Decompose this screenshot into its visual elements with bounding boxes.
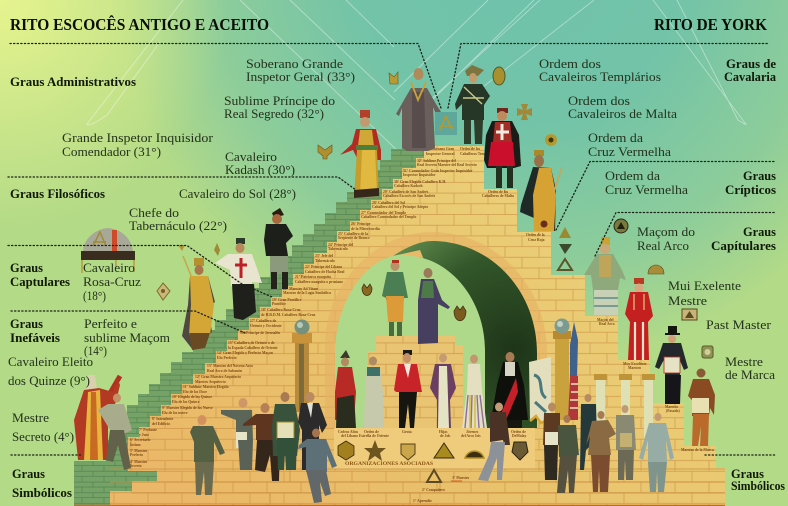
stair degree plates: del Edificio — [152, 422, 170, 426]
title: Rito Escocês Antigo e Aceito: RITO ESCOCÊS ANTIGO E ACEITO — [10, 15, 269, 34]
stair degree plates: 15° Caballero de Oriente o de — [228, 341, 275, 345]
icon: double-headed eagle — [318, 145, 332, 159]
arch — [325, 232, 547, 428]
label: Cavaleiro Rosa-Cruz: Rosa-Cruz — [83, 274, 141, 289]
stair degree plates: Muy Excelente — [623, 362, 647, 366]
label: Maçom do Real Arco: Maçom do — [637, 224, 695, 239]
stair degree plates: Caballeros Templarios — [460, 152, 496, 156]
stair degree plates: 33° Soberano Gran — [424, 147, 454, 151]
left column with sphere — [292, 320, 312, 412]
stair degree plates: 19° Gran Pontífice — [272, 298, 302, 302]
stair degree plates: Estrella de Oriente — [359, 434, 389, 438]
label: Mui Exelente Mestre: Mestre — [668, 293, 707, 308]
label: Mestre Secreto: Mestre — [12, 410, 49, 425]
label: Mestre de Marca: Mestre — [725, 354, 763, 369]
stair degree plates: 4° Maestro — [130, 460, 147, 464]
stair degree plates: 10° Elegido de los Quince — [172, 395, 212, 399]
stair degree plates: 28° Caballero del Sol — [372, 201, 405, 205]
stair degree plates: 23° Jefe del — [315, 254, 333, 258]
heading: Graus Captulares: Graus — [10, 261, 43, 275]
stair degree plates: Real Arco — [599, 322, 615, 326]
figure: Past Master with top hat — [655, 326, 688, 404]
label: Cavaleiro Kadash: Cavaleiro — [225, 149, 277, 164]
label: Ordem dos Cavaleiros de Malta: Cavaleiros de Malta — [568, 106, 677, 121]
title: Rito de York: RITO DE YORK — [654, 15, 768, 34]
stair degree plates: Maestro de la Marca — [681, 448, 714, 452]
figure: orange skirt woman in arch — [382, 260, 408, 336]
figure: purple and white woman in row — [430, 354, 456, 428]
label: Maçom do Real Arco — [637, 224, 695, 253]
label: Grande Inspetor Inquisidor Comendador — [62, 130, 214, 159]
stair degree plates: 7° Preboste — [139, 428, 157, 432]
figure: Sublime Príncipe — [340, 110, 381, 198]
label: Cavaleiro Kadash: Kadash (30°) — [225, 162, 295, 177]
label: Perfeito e sublime Maçom — [84, 316, 170, 358]
figure: man in dark blue-green — [580, 394, 597, 470]
stair degree plates: del Arco Iris — [461, 434, 481, 438]
stair degree plates: 24° Príncipe del — [328, 243, 353, 247]
figure: man climbing in grey — [98, 394, 132, 470]
stair degree plates: 9° Maestro Elegido de los Nueve — [162, 406, 213, 410]
label: Ordem da Cruz Vermelha (upper): Cruz Vermelha — [588, 144, 671, 159]
heading: Graus Simbólicos left — [12, 467, 72, 500]
stair degree plates: 22° Príncipe del Líbano — [305, 265, 342, 269]
figure: man from behind, grey-blue — [298, 428, 337, 503]
label: Sublime Príncipe do Real Segredo: Real Segredo (32°) — [224, 106, 324, 121]
figure: bishop in red robe — [74, 375, 120, 460]
heading: Graus Inefáveis — [10, 317, 60, 345]
heading: Graus Crípticos: Graus — [743, 169, 776, 183]
label: Cavaleiro Eleito dos Quinze: dos Quinze (9°) — [8, 373, 90, 388]
stair degree plates: Orden de los — [460, 147, 481, 151]
figure: man with white apron near banner — [543, 402, 560, 480]
label: Ordem dos Cavaleiros Templários — [539, 56, 661, 84]
stair degree plates: 8° Intendente — [152, 417, 174, 421]
heading: Graus Administrativos: Graus Administrativos — [10, 75, 136, 89]
figure: Soberano Grande Inspetor Geral — [396, 68, 441, 151]
label: Ordem da Cruz Vermelha (upper) — [588, 130, 671, 159]
heading: Graus Capítulares: Capítulares — [711, 239, 776, 253]
stair degree plates: 27° Comendador del Templo — [361, 211, 406, 215]
stair degree plates: Jóvenes — [466, 430, 479, 434]
stair degree plates: 5° Maestro — [130, 449, 147, 453]
stair degree plates: Caballero Escocés de San Andrés — [383, 194, 436, 198]
stair degree plates: la Espada Caballero de Oriente — [228, 346, 278, 350]
figure: Chefe do Tabernáculo, white vestment with cross — [215, 238, 262, 320]
stair degree plates: 26° Príncipe — [351, 222, 371, 226]
label: Perfeito e sublime Maçom: sublime Maçom — [84, 330, 170, 345]
stair degree plates: 2° Compañero — [422, 488, 445, 492]
figure: red tuxedo man in row — [394, 350, 422, 428]
stepped pyramid: tan masonry body — [74, 146, 725, 506]
heading: Graus Simbólicos right — [731, 467, 785, 493]
stair degree plates: 16° Príncipe de Jerusalén — [240, 331, 280, 335]
figure: man with white apron — [221, 398, 253, 470]
stair degree plates: Secreto — [130, 464, 142, 468]
figure: man in dark suit — [298, 392, 327, 470]
label: Ordem da Cruz Vermelha (lower): Cruz Vermelha — [605, 182, 688, 197]
heading: Graus Simbólicos right: Simbólicos — [731, 479, 785, 493]
label: Grande Inspetor Inquisidor Comendador: Comendador (31°) — [62, 144, 161, 159]
icon: shriner scimitar left — [362, 284, 372, 296]
label: Ordem da Cruz Vermelha (lower) — [605, 168, 688, 197]
small columns — [594, 374, 655, 438]
figure: Cruz Vermelha robed figure — [520, 150, 562, 231]
label: Ordem da Cruz Vermelha (upper): Ordem da — [588, 130, 643, 145]
stair degree plates: Cedros Altos — [338, 430, 359, 434]
stair degree plates: 18° Caballero Rosa-Cruz — [261, 308, 301, 312]
stair degree plates: de H.R.D.M. Caballero Rosa-Cruz — [261, 313, 316, 317]
figure: rainbow gown woman in row — [462, 354, 487, 428]
stair degree plates: Íntimo — [130, 442, 141, 447]
label: Cavaleiro Rosa-Cruz: (18°) — [83, 288, 106, 303]
stair degree plates: Cruz Roja — [528, 238, 545, 242]
label: Sublime Príncipe do Real Segredo: Sublime Príncipe do — [224, 93, 335, 108]
heading: Graus Inefáveis: Inefáveis — [10, 331, 60, 345]
figure: Mui Exelente Mestre — [625, 278, 653, 360]
stair degree plates: del Líbano — [341, 434, 358, 438]
stair degree plates: 29° Caballero de San Andrés — [383, 190, 429, 194]
figure: dark purple robed woman in arch — [418, 268, 450, 344]
label: Cavaleiro Rosa-Cruz: Cavaleiro — [83, 260, 135, 275]
stair degree plates: Tabernáculo — [328, 247, 348, 251]
stair degree plates: Hijas — [439, 430, 448, 434]
stair degree plates: 14° Gran Elegido y Perfecto Maçon — [217, 351, 273, 355]
stair degree plates: 6° Secretario — [130, 438, 151, 442]
label: Ordem da Cruz Vermelha (lower): Ordem da — [605, 168, 660, 183]
label: Soberano Grande Inspetor Geral: Soberano Grande — [246, 56, 343, 71]
arch inner tiers — [110, 336, 725, 505]
stair degree plates: Gruta — [402, 430, 412, 434]
icon: cross pattée — [517, 104, 532, 120]
heading: Graus Filosóficos: Graus Filosóficos — [10, 187, 105, 201]
label: Mestre de Marca: de Marca — [725, 367, 775, 382]
label: Mestre de Marca — [725, 354, 775, 382]
stair degree plates: Caballeros de Malta — [482, 194, 514, 198]
heading: Graus de Cavalaria — [724, 57, 777, 84]
stair degree plates: de la Misericordia — [351, 227, 380, 231]
stair degree plates: 13° Maestro del Noveno Arco — [207, 364, 253, 368]
label: Soberano Grande Inspetor Geral: Inspetor Geral (33°) — [246, 69, 355, 84]
stair degree plates: 30° Gran Elegido Caballero K.H. — [394, 180, 446, 184]
heading: Graus Crípticos: Crípticos — [725, 183, 776, 197]
label: Ordem dos Cavaleiros Templários: Cavaleiros Templários — [539, 69, 661, 84]
stair degree plates: Caballero Kadosh — [394, 184, 423, 188]
icon: diamond emblem — [157, 283, 170, 300]
icon: small gold ornaments — [178, 243, 220, 256]
label: Sublime Príncipe do Real Segredo — [224, 93, 335, 121]
label: Mestre Secreto: Secreto (4°) — [12, 429, 74, 444]
figure: man with apron in grey — [616, 405, 636, 480]
figure: man from behind, dark green — [557, 415, 579, 493]
icon: gold crown emblem — [389, 72, 398, 84]
label: Cavaleiro Kadash — [225, 149, 295, 177]
stair degree plates: Orden de — [364, 430, 379, 434]
label: Mui Exelente Mestre — [668, 278, 741, 308]
leader lines — [8, 44, 776, 455]
heading: Graus Captulares — [10, 261, 70, 289]
icon: gold crown arc — [648, 265, 664, 274]
organizations title: ORGANIZACIONES ASOCIADAS — [345, 461, 433, 467]
stair degree plates: 3° Maestro — [452, 476, 469, 480]
label: Chefe do Tabernáculo — [129, 205, 227, 233]
stair degree plates: Orden de la — [526, 233, 545, 237]
stair degree plates: Orden de los — [488, 190, 509, 194]
figure: Cavaleiro Templário officer — [455, 65, 490, 144]
stair degree plates: de Job — [440, 434, 450, 438]
figure: man with masonic apron, green suit — [272, 392, 300, 470]
figure: Maçom do Real Arco — [584, 237, 626, 315]
icon: mark keystone — [702, 346, 713, 358]
stair degree plates: 20° Maestro Ad Vitam — [283, 287, 319, 291]
stair degree plates: Maestro — [628, 366, 641, 370]
stair degree plates: (Pasado) — [666, 409, 680, 413]
label: Cavaleiro Eleito dos Quinze — [8, 354, 93, 388]
stair degree plates: Real Arco de Salomón — [207, 369, 242, 373]
stair degree plates: Maestro — [665, 405, 678, 409]
figure: Cavaleiro de Malta — [484, 108, 521, 188]
banner — [529, 357, 551, 423]
heading: Graus Simbólicos left: Graus — [12, 467, 45, 481]
label: Perfeito e sublime Maçom: Perfeito e — [84, 316, 137, 331]
label: Perfeito e sublime Maçom: (14°) — [84, 343, 107, 358]
icon: royal arch circle — [614, 219, 628, 233]
label: Maçom do Real Arco: Real Arco — [637, 238, 689, 253]
heading: Graus Captulares: Captulares — [10, 275, 70, 289]
label: Grande Inspetor Inquisidor Comendador: Grande Inspetor Inquisidor — [62, 130, 214, 145]
stair degree plates: Maçón del — [597, 318, 614, 322]
stair degree plates: Real Secreto Maestre del Real Secreto — [417, 163, 477, 167]
heading: Graus Simbólicos right: Graus — [731, 467, 764, 481]
icon: gold oval emblem — [493, 67, 505, 85]
stair degree plates: 21° Patriarca noaquita — [295, 275, 331, 279]
stair degree plates: Tabernáculo — [315, 259, 335, 263]
stair degree plates: 12° Gran Maestro Arquitecto — [195, 375, 241, 379]
stair degree plates: Maestro de la Logia Simbólica — [283, 291, 331, 295]
stair degree plates: Caballero Comendador del Templo — [361, 215, 416, 219]
stair degree plates: 31° Comendador Gran Inspector Inquisidor — [403, 169, 473, 173]
stair degree plates: Elu de los Quince — [172, 400, 200, 404]
figure: king with gold robe — [182, 256, 215, 350]
stair degree plates: Orden de — [511, 430, 526, 434]
stair degree plates: DeMolay — [512, 434, 526, 438]
stair degree plates: 1° Aprendiz — [413, 499, 432, 503]
icon: dark sun — [545, 134, 557, 146]
stair degree plates: Inspector General — [426, 152, 455, 156]
label: Cavaleiro Eleito dos Quinze: Cavaleiro Eleito — [8, 354, 93, 369]
stair degree plates: Oriente y Occidente — [250, 324, 282, 328]
figure: black cape figure in row — [491, 352, 528, 428]
stair degree plates: Inspector Inquisidor — [403, 173, 436, 177]
label: Cavaleiro Rosa-Cruz — [83, 260, 141, 303]
stair degree plates: Perfecto — [130, 453, 143, 457]
heading: Graus Simbólicos left: Simbólicos — [12, 486, 72, 500]
stair degree plates: Caballero de Hacha Real — [305, 270, 344, 274]
heading: Graus Inefáveis: Graus — [10, 317, 43, 331]
label: Ordem dos Cavaleiros Templários: Ordem dos — [539, 56, 601, 71]
stair degree plates: Elu de los Doce — [183, 390, 207, 394]
stair degree plates: Elu de los nueve — [162, 411, 188, 415]
label: Chefe do Tabernáculo: Chefe do — [129, 205, 179, 220]
icon: green cloth with square and compass — [435, 112, 457, 135]
right column with sphere and flag — [553, 318, 578, 420]
emblem row: associated organizations — [338, 440, 528, 482]
figure: Mestre de Marca — [688, 368, 715, 446]
icon: cryptic triangles — [558, 227, 572, 270]
stair degree plates: y Juez — [139, 433, 149, 437]
label: Past Master: Past Master — [706, 317, 772, 332]
figure: Cavaleiro do Sol — [264, 208, 293, 289]
figure: suited man — [190, 415, 225, 495]
stair degree plates: Caballero noaquita o prusiano — [295, 280, 343, 284]
label: Ordem dos Cavaleiros de Malta — [568, 93, 677, 121]
stair degree plates: Elu Perfecto — [217, 356, 237, 360]
stair degree plates: 11° Sublime Maestro Elegido — [183, 385, 229, 389]
icon: shriner scimitar right — [454, 306, 466, 321]
stair degree plates — [130, 147, 714, 503]
heading: Graus de Cavalaria: Graus de — [726, 57, 776, 71]
stair degree plates: 32° Sublime Príncipe del — [417, 159, 456, 163]
figure: man in light blue suit — [639, 413, 674, 492]
label: Chefe do Tabernáculo: Tabernáculo (22°) — [129, 218, 227, 233]
stair degree plates: 25° Caballero de la — [338, 232, 368, 236]
heading: Graus Crípticos — [725, 169, 776, 197]
stair degree plates: Pontífice — [272, 302, 286, 306]
figure: white gown woman in row — [364, 356, 384, 428]
label: Mui Exelente Mestre: Mui Exelente — [668, 278, 741, 293]
stair degree plates: 17° Caballero de — [250, 319, 277, 323]
stair degree plates: Serpiente de Bronce — [338, 236, 370, 240]
heading: Graus Capítulares — [711, 225, 776, 253]
stair degree plates: Maestro Arquitecto — [195, 380, 226, 384]
stair degree plates: Caballero del Sol y Príncipe Adepto — [372, 205, 428, 209]
figure: red and black robed figure in row — [335, 350, 356, 428]
heading: Graus Capítulares: Graus — [743, 225, 776, 239]
icon: open book emblem — [682, 309, 697, 320]
label: Soberano Grande Inspetor Geral — [246, 56, 355, 84]
stepped pyramid: green stair band — [74, 146, 430, 506]
figure: man in tan from behind — [586, 411, 616, 492]
icon: open book with red ribbon — [81, 228, 135, 273]
label: Ordem dos Cavaleiros de Malta: Ordem dos — [568, 93, 630, 108]
label: Mestre Secreto — [12, 410, 74, 444]
heading: Graus de Cavalaria: Cavalaria — [724, 70, 777, 84]
figure: man in brown — [243, 403, 280, 481]
label: Cavaleiro do Sol: Cavaleiro do Sol (28°) — [179, 186, 296, 201]
figure: older man dark jacket grey trousers — [478, 402, 510, 481]
